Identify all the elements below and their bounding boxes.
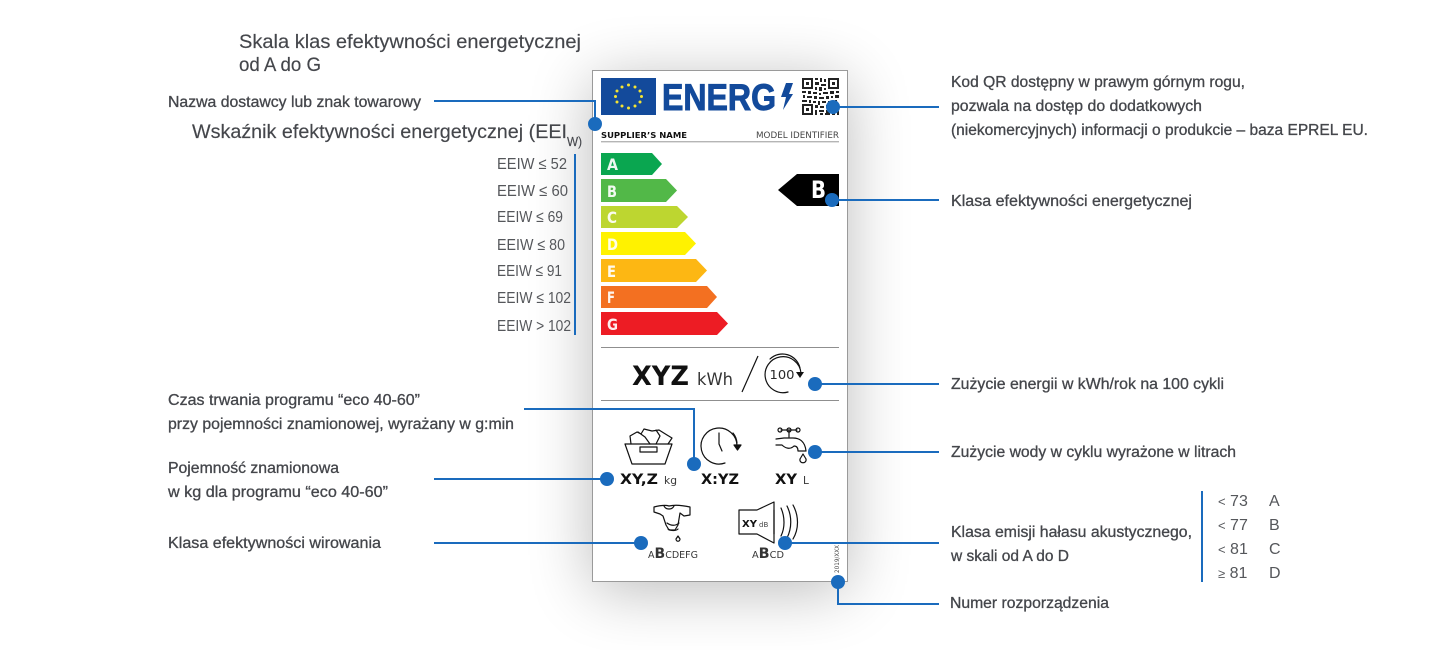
icon: QR code	[802, 78, 839, 115]
icon: water tap	[776, 428, 806, 463]
label: energy class: Klasa efektywności energetycznej	[951, 193, 1192, 210]
efficiency scale A to G: D	[607, 235, 618, 254]
regulation number: 2019/XXX	[834, 545, 841, 573]
efficiency scale A to G: F	[607, 288, 615, 307]
label: noise class	[950, 524, 1192, 565]
EEI values list: EEIW ≤ 60	[497, 183, 568, 200]
logo: ENERG: ENERG	[662, 77, 776, 118]
noise thresholds table: < 77	[1218, 517, 1248, 534]
EEI values list: EEIW ≤ 102	[497, 290, 571, 307]
energy consumption value: 100	[770, 368, 794, 382]
EEI values list: EEIW ≤ 69	[497, 209, 563, 226]
energy consumption value: XYZ	[632, 361, 689, 392]
efficiency scale A to G	[601, 153, 728, 335]
efficiency scale A to G: B	[607, 182, 617, 201]
model identifier: MODEL IDENTIFIER	[756, 131, 839, 141]
label: noise class: w skali od A do D	[950, 548, 1069, 565]
EEI values list: EEIW > 102	[497, 318, 571, 335]
noise thresholds table: < 81	[1218, 541, 1248, 558]
noise thresholds table: D	[1269, 565, 1281, 582]
callout lines and dots	[434, 100, 1202, 604]
EEI values list: EEIW ≤ 91	[497, 263, 562, 280]
spin scale: ABCDEFG	[648, 546, 698, 562]
energy consumption value: kWh	[697, 370, 733, 389]
card shadow	[592, 80, 847, 590]
icon: spin shirt	[654, 505, 690, 541]
label: water use: Zużycie wody w cyklu wyrażone w litrach	[951, 444, 1236, 461]
label: QR code	[951, 74, 1368, 139]
label: duration	[168, 392, 514, 433]
icon: noise speaker	[739, 502, 798, 543]
label: QR code: Kod QR dostępny w prawym górnym rogu,	[951, 74, 1245, 91]
label: capacity	[167, 460, 388, 501]
label: energy use: Zużycie energii w kWh/rok na 100 cykli	[951, 376, 1224, 393]
noise thresholds table: < 73	[1218, 493, 1248, 510]
label: capacity: w kg dla programu “eco 40-60”	[167, 484, 388, 501]
label: spin class: Klasa efektywności wirowania	[168, 535, 381, 552]
capacity value: XY,Z	[620, 472, 658, 488]
icon: noise speaker: dB	[759, 521, 768, 529]
noise thresholds table	[1218, 493, 1281, 582]
label: QR code: pozwala na dostęp do dodatkowych	[951, 98, 1202, 115]
energy consumption value	[632, 354, 804, 393]
heading: EEI index: W)	[567, 134, 582, 149]
water value	[775, 472, 809, 488]
icon: laundry basket	[625, 429, 672, 464]
label: noise class: Klasa emisji hałasu akustycznego,	[951, 524, 1192, 541]
EEI values list	[497, 156, 571, 335]
icon: clock	[701, 428, 741, 464]
icon: EU flag	[601, 78, 656, 115]
label: regulation: Numer rozporządzenia	[950, 595, 1109, 612]
heading: EEI index: Wskaźnik efektywności energetycznej (EEI	[192, 121, 567, 143]
efficiency scale A to G: G	[607, 315, 618, 334]
label: duration: przy pojemności znamionowej, wyrażany w g:min	[168, 416, 514, 433]
label: capacity: Pojemność znamionowa	[168, 460, 339, 477]
EEI values list: EEIW ≤ 80	[497, 237, 565, 254]
class arrow B	[778, 174, 839, 206]
noise thresholds table: B	[1269, 517, 1280, 534]
efficiency scale A to G: E	[607, 262, 616, 281]
capacity value	[620, 472, 677, 488]
label: QR code: (niekomercyjnych) informacji o produkcie – baza EPREL EU.	[951, 122, 1368, 139]
icon: noise speaker: XY	[742, 519, 758, 530]
heading: scale: Skala klas efektywności energetycznej	[239, 31, 581, 53]
heading: scale line two: od A do G	[239, 54, 321, 76]
efficiency scale A to G: A	[607, 155, 619, 174]
label: duration: Czas trwania programu “eco 40-60”	[168, 392, 420, 409]
supplier name: SUPPLIER’S NAME	[601, 131, 687, 140]
capacity value: kg	[664, 475, 677, 487]
noise thresholds table: A	[1269, 493, 1280, 510]
panel: energy label	[592, 70, 848, 582]
EEI values list: EEIW ≤ 52	[497, 156, 567, 173]
label: supplier: Nazwa dostawcy lub znak towarowy	[168, 94, 421, 111]
duration value: X:YZ	[701, 472, 739, 488]
water value: XY	[775, 472, 798, 488]
class arrow B: B	[811, 176, 826, 204]
noise thresholds table: ≥ 81	[1218, 565, 1247, 582]
icon: lightning bolt	[781, 83, 793, 110]
water value: L	[803, 475, 809, 487]
efficiency scale A to G: C	[607, 208, 617, 227]
noise scale: ABCD	[752, 546, 784, 562]
noise thresholds table: C	[1269, 541, 1281, 558]
